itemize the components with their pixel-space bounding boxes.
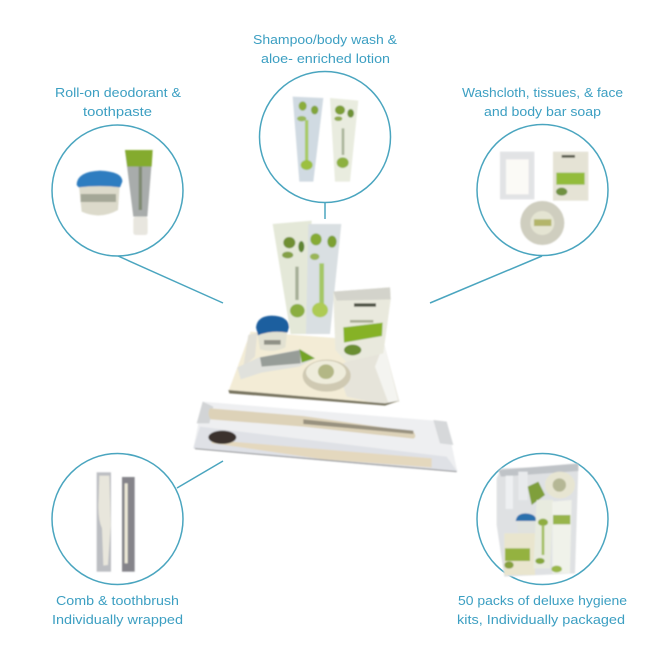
washcloth bag — [228, 332, 399, 405]
washcloth packet — [500, 152, 534, 199]
soap — [545, 472, 575, 498]
label: comb and toothbrush — [52, 593, 183, 627]
circle: deodorant and toothpaste — [52, 125, 183, 256]
connector: shampoo circle to kit — [324, 202, 326, 219]
connector: deodorant circle to kit — [118, 256, 223, 303]
soap — [303, 360, 351, 392]
wrapped comb and toothbrush — [193, 402, 457, 472]
deodorant jar — [257, 331, 287, 351]
label: 50 packs — [457, 593, 627, 627]
label: 50 packs: kits, Individually packaged — [457, 612, 625, 627]
toothbrush in bag — [506, 476, 513, 509]
toothbrush — [122, 477, 135, 572]
label: deodorant and toothpaste: Roll-on deodorant & — [55, 85, 181, 100]
label: washcloth tissues soap: Washcloth, tissues, & face — [462, 85, 623, 100]
toothpaste — [237, 349, 315, 379]
circle: shampoo and lotion — [260, 72, 390, 202]
label: comb and toothbrush: Individually wrapped — [52, 612, 183, 627]
tube right — [306, 224, 341, 334]
label: shampoo and lotion: Shampoo/body wash & — [253, 32, 397, 47]
soap — [520, 201, 564, 245]
tissues — [504, 533, 535, 575]
label: shampoo and lotion: aloe- enriched lotion — [261, 51, 390, 66]
connector: comb circle to kit — [177, 461, 223, 488]
label: shampoo and lotion — [253, 32, 397, 66]
circle: comb and toothbrush — [52, 454, 183, 584]
tissue box — [333, 287, 391, 362]
tube left — [273, 221, 312, 334]
label: deodorant and toothpaste: toothpaste — [83, 104, 152, 119]
central kit photo — [193, 221, 457, 472]
label: washcloth tissues soap: and body bar soap — [484, 104, 601, 119]
comb — [97, 472, 111, 572]
tubes — [533, 500, 553, 568]
label: 50 packs: 50 packs of deluxe hygiene — [458, 593, 627, 608]
toothpaste — [528, 482, 545, 505]
label: comb and toothbrush: Comb & toothbrush — [56, 593, 179, 608]
bag — [497, 466, 578, 577]
label: washcloth tissues soap — [462, 85, 623, 119]
connector: washcloth circle to kit — [430, 256, 542, 303]
jar — [517, 520, 536, 534]
circle: washcloth tissues soap — [477, 124, 608, 256]
tissues — [553, 152, 588, 201]
label: deodorant and toothpaste — [55, 85, 181, 119]
circle: 50 packs kit — [477, 454, 608, 584]
tube — [125, 150, 153, 217]
jar — [79, 182, 120, 215]
